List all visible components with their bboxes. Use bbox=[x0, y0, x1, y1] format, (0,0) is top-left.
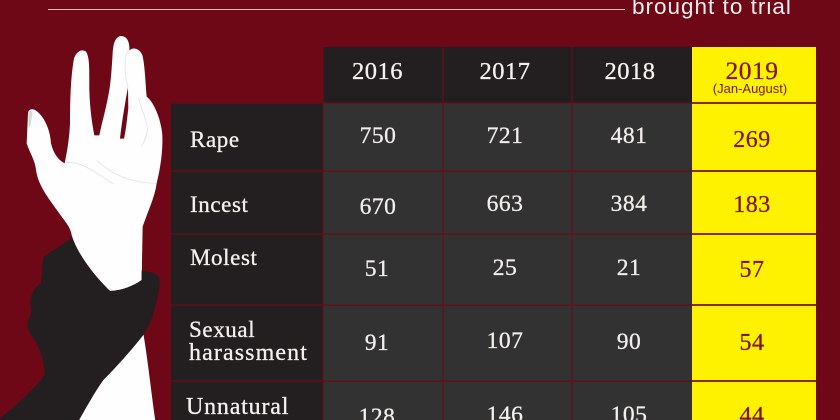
row: Sexual harassment: 107 bbox=[487, 328, 523, 354]
header years: 2019 bbox=[726, 56, 778, 85]
row: Molest: 57 bbox=[740, 257, 764, 283]
row: Sexual harassment: 90 bbox=[617, 329, 641, 355]
data columns bbox=[324, 104, 692, 420]
row: Incest: 663 bbox=[487, 191, 523, 217]
row: Molest: Molest bbox=[190, 245, 258, 270]
row: Molest: 51 bbox=[365, 256, 389, 282]
row: Sexual harassment: Sexual bbox=[189, 317, 255, 342]
row: Incest bbox=[190, 191, 771, 220]
header cells bbox=[324, 47, 816, 102]
lower arm bbox=[79, 333, 155, 420]
raised white hand bbox=[27, 36, 162, 291]
dark gripping hand bbox=[0, 236, 160, 420]
row: Sexual harassment bbox=[189, 317, 764, 366]
row dividers bbox=[171, 170, 692, 382]
row: Molest: 25 bbox=[493, 255, 517, 281]
row: Rape bbox=[190, 123, 771, 153]
header years: 2017 bbox=[480, 58, 530, 85]
row: Incest: Incest bbox=[190, 192, 249, 217]
row: Incest: 183 bbox=[733, 192, 771, 218]
row: Sexual harassment: harassment bbox=[189, 340, 308, 366]
row: Rape: 269 bbox=[733, 127, 771, 153]
illustration: hand gripping wrist bbox=[0, 36, 162, 420]
row: Sexual harassment: 91 bbox=[365, 330, 389, 356]
row: Sexual harassment: 54 bbox=[740, 330, 764, 356]
row: Molest bbox=[190, 245, 764, 283]
row: Unnatural bbox=[186, 394, 764, 420]
palm creases bbox=[66, 49, 156, 184]
row: Incest: 670 bbox=[360, 194, 396, 220]
table bbox=[171, 47, 816, 420]
header years: 2018 bbox=[604, 58, 656, 85]
title rule bbox=[48, 9, 625, 10]
header years: 2016 bbox=[352, 58, 403, 85]
row: Rape: Rape bbox=[190, 127, 240, 152]
highlighted 2019 column bbox=[692, 104, 816, 420]
row: Rape: 481 bbox=[611, 123, 647, 149]
row: Rape: 750 bbox=[360, 123, 396, 149]
row: Molest: 21 bbox=[617, 255, 641, 281]
row: Rape: 721 bbox=[487, 123, 523, 149]
gap between fingers bbox=[120, 87, 128, 139]
header years: (Jan-August) bbox=[713, 81, 787, 96]
thumb nail shade bbox=[29, 111, 33, 128]
row: Incest: 384 bbox=[611, 191, 647, 217]
header years bbox=[352, 56, 787, 96]
row: Unnatural: Unnatural bbox=[186, 394, 289, 420]
category column bbox=[171, 104, 322, 420]
